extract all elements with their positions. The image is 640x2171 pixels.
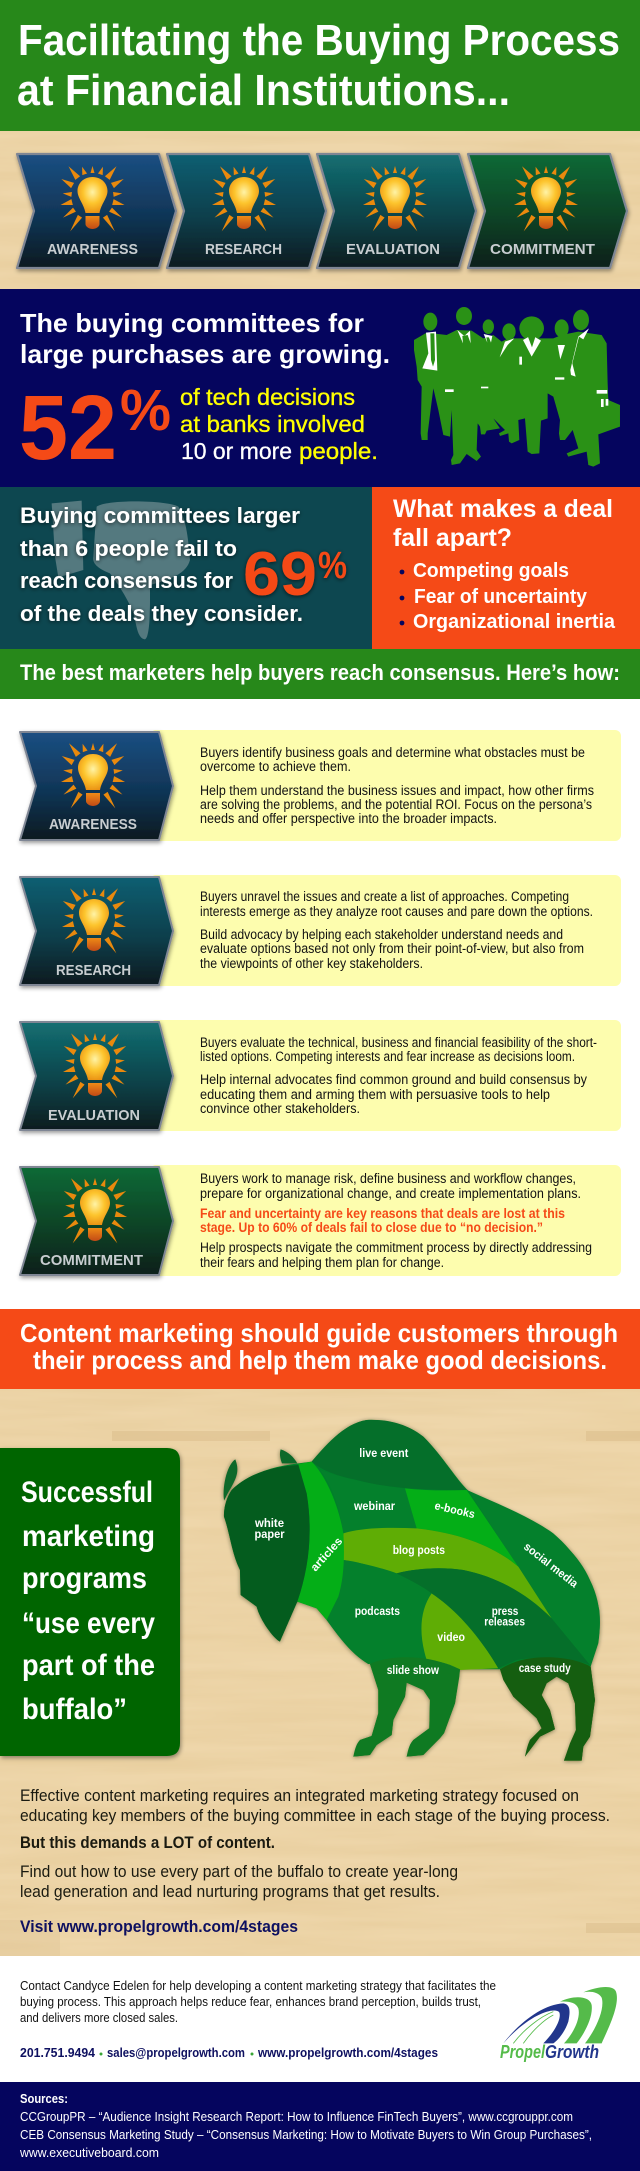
callout: use every part of the buffalo: Successful — [21, 1476, 153, 1509]
card text: Buyers work to manage risk, define business and workflow changes, — [200, 1171, 576, 1186]
text: committees larger than 6: than 6 people fail to — [20, 536, 237, 561]
contact text — [20, 1978, 496, 2025]
labels: buffalo parts — [254, 1448, 580, 1677]
callout: use every part of the buffalo: part of the — [22, 1649, 155, 1682]
labels: buffalo parts: blog posts — [393, 1545, 445, 1557]
card text: Buyers identify business goals and determine what obstacles must be — [200, 745, 585, 760]
card text — [200, 1035, 597, 1116]
chevron: commitment: COMMITMENT — [490, 241, 595, 258]
stat: 52 percent: % — [120, 378, 171, 443]
text: committees larger than 6: of the deals they consider. — [20, 601, 303, 626]
labels: buffalo parts: webinar — [353, 1501, 395, 1513]
callout: use every part of the buffalo: buffalo” — [22, 1693, 127, 1726]
stat: 69 percent: % — [318, 545, 347, 587]
contact panel — [0, 1956, 640, 2082]
chevron badge: EVALUATION — [48, 1107, 140, 1124]
card text: needs and offer perspective into the broader impacts. — [200, 811, 497, 826]
panel: what makes a deal fall apart — [372, 487, 640, 649]
title banner — [0, 0, 640, 131]
sources panel: CEB Consensus Marketing Study – “Consensus Marketing: How to Motivate Buyers to Win Group Purchases”, — [20, 2127, 592, 2142]
heading: fall apart: fall apart? — [393, 524, 512, 552]
labels: buffalo parts: press — [492, 1606, 518, 1618]
stage card: commitment — [20, 1165, 621, 1276]
part: case study — [500, 1657, 595, 1761]
callout: use every part of the buffalo — [0, 1448, 180, 1756]
chevron: evaluation: EVALUATION — [346, 241, 440, 258]
card text — [200, 745, 594, 826]
labels: buffalo parts: live event — [359, 1448, 408, 1460]
text block: content strategy: Effective content marketing requires an integrated marketing strategy focused on — [20, 1787, 579, 1805]
chevron: research: RESEARCH — [205, 241, 282, 258]
stage card: research — [20, 875, 621, 986]
sources panel: CCGroupPR – “Audience Insight Research Report: How to Influence FinTech Buyers”, www.ccgrouppr.com — [20, 2109, 573, 2124]
logo: PropelGrowth: Propel — [500, 2042, 546, 2062]
heading bar: best marketers — [0, 649, 640, 699]
card text: Buyers unravel the issues and create a list of approaches. Competing — [200, 889, 569, 904]
stat description — [180, 384, 378, 464]
part: press releases — [397, 1568, 590, 1668]
contact text: and delivers more closed sales. — [20, 2010, 178, 2025]
icon: thumbs down — [52, 501, 190, 639]
card text: their fears and helping them plan for change. — [200, 1255, 444, 1270]
card text: are solving the problems, and the potential ROI. Focus on the persona’s — [200, 797, 592, 812]
part: video — [421, 1593, 498, 1670]
card text: interests emerge as they analyze root causes and pare down the options. — [200, 904, 593, 919]
labels: buffalo parts: video — [437, 1632, 465, 1644]
part: live event — [312, 1420, 467, 1490]
stat: 52 percent — [19, 377, 171, 479]
card text — [200, 889, 593, 971]
labels: buffalo parts: releases — [484, 1617, 525, 1629]
callout: use every part of the buffalo: programs — [22, 1562, 147, 1595]
icon: committee silhouettes — [414, 307, 620, 467]
stage card: evaluation — [20, 1020, 621, 1131]
sources panel: Sources: — [20, 2091, 68, 2106]
chart: buffalo content map — [224, 1420, 600, 1761]
heading: fall apart: What makes a deal — [393, 495, 613, 523]
title banner: at Financial Institutions... — [17, 66, 510, 115]
labels: buffalo parts: white — [254, 1518, 284, 1530]
contact details: 201.751.9494 — [20, 2045, 96, 2060]
chevron badge — [20, 877, 173, 985]
stat description: 10 or more — [181, 438, 292, 464]
callout: use every part of the buffalo: marketing — [22, 1520, 155, 1553]
heading: committees: large purchases are growing. — [20, 339, 390, 369]
sources panel — [0, 2082, 640, 2171]
wood section — [0, 1389, 640, 1956]
card text: Fear and uncertainty are key reasons that deals are lost at this — [200, 1206, 565, 1221]
text block: content strategy: lead generation and lead nurturing programs that get results. — [20, 1883, 440, 1901]
part: e-books — [405, 1488, 518, 1567]
heading bar: content marketing: their process and help them make good decisions. — [33, 1345, 607, 1375]
callout: use every part of the buffalo: “use every — [22, 1607, 155, 1640]
chevron: commitment — [468, 154, 627, 268]
heading: fall apart — [393, 495, 613, 552]
part: slide show — [353, 1657, 460, 1757]
part: social media — [468, 1491, 600, 1665]
chevron badge — [20, 732, 173, 840]
part: webinar — [320, 1470, 417, 1533]
card text: Build advocacy by helping each stakeholder understand needs and — [200, 927, 563, 942]
chevron badge — [20, 1167, 173, 1275]
chevron badge — [20, 1022, 173, 1130]
stat: 69 percent — [243, 540, 347, 609]
chevron: awareness — [17, 154, 176, 268]
labels: buffalo parts: paper — [254, 1529, 285, 1541]
card text: evaluate options based not only from their point-of-view, but also from — [200, 941, 584, 956]
text: committees larger than 6: Buying committees larger — [20, 503, 300, 528]
card text: overcome to achieve them. — [200, 759, 351, 774]
card text: convince other stakeholders. — [200, 1101, 360, 1116]
panel: committees growing — [0, 289, 640, 487]
heading: committees: The buying committees for — [20, 308, 364, 338]
text block: content strategy: Visit www.propelgrowth.com/4stages — [20, 1918, 298, 1936]
text block: content strategy: But this demands a LOT of content. — [20, 1834, 275, 1852]
chevron: awareness: AWARENESS — [47, 241, 138, 258]
card text: prepare for organizational change, and create implementation plans. — [200, 1186, 581, 1201]
card text: Help them understand the business issues and impact, how other firms — [200, 783, 594, 798]
stat description: at banks involved — [180, 411, 365, 437]
part: articles — [297, 1462, 344, 1620]
list: reasons: Competing goals — [413, 559, 569, 582]
card text — [200, 1171, 592, 1270]
logo: PropelGrowth: Growth — [545, 2042, 599, 2062]
sources panel: www.executiveboard.com — [19, 2145, 159, 2160]
stat description: of tech decisions — [180, 384, 355, 410]
labels: buffalo parts: slide show — [387, 1665, 439, 1677]
stage card: awareness — [20, 730, 621, 841]
stat: 69 percent: 69 — [243, 540, 317, 609]
heading: committees — [20, 308, 390, 369]
panel: consensus failure — [0, 487, 372, 649]
card text: stage. Up to 60% of deals fail to close due to “no decision.” — [200, 1220, 543, 1235]
wood band with process chevrons — [0, 131, 640, 289]
contact details — [20, 2045, 438, 2060]
card text: Help prospects navigate the commitment process by directly addressing — [200, 1240, 592, 1255]
contact details: www.propelgrowth.com/4stages — [257, 2045, 438, 2060]
chevron badge: RESEARCH — [56, 962, 131, 979]
stat: 52 percent: 52 — [19, 377, 117, 479]
chevron badge: COMMITMENT — [40, 1252, 143, 1269]
labels: buffalo parts: e-books — [433, 1500, 476, 1521]
chevron: evaluation — [317, 154, 476, 268]
text: committees larger than 6: reach consensus for — [20, 568, 233, 593]
contact text: Contact Candyce Edelen for help developing a content marketing strategy that facilitates the — [20, 1978, 496, 1993]
card text: Help internal advocates find common ground and build consensus by — [200, 1072, 587, 1087]
part: podcasts — [327, 1560, 432, 1664]
contact text: buying process. This approach helps reduce fear, enhances brand perception, builds trust, — [20, 1994, 481, 2009]
labels: buffalo parts: social media — [521, 1541, 580, 1591]
stat description: people. — [299, 438, 378, 464]
chevron: research — [167, 154, 326, 268]
card text: listed options. Competing interests and fear increase as decisions loom. — [200, 1049, 575, 1064]
text block: content strategy — [20, 1787, 610, 1936]
text block: content strategy: educating key members of the buying committee in each stage of the buying process. — [20, 1807, 610, 1825]
list: reasons — [400, 559, 616, 633]
contact details: sales@propelgrowth.com — [107, 2045, 245, 2060]
card text: educating them and arming them with persuasive tools to help — [200, 1087, 550, 1102]
text: committees larger than 6 — [20, 503, 303, 626]
text block: content strategy: Find out how to use every part of the buffalo to create year-long — [20, 1863, 458, 1881]
card text: Buyers evaluate the technical, business and financial feasibility of the short- — [200, 1035, 597, 1050]
part: white paper — [224, 1465, 310, 1642]
list: reasons: Organizational inertia — [413, 610, 616, 633]
part: blog posts — [343, 1528, 552, 1618]
list: reasons: Fear of uncertainty — [414, 585, 588, 608]
labels: buffalo parts: articles — [309, 1536, 345, 1574]
chevron badge: AWARENESS — [49, 816, 137, 833]
heading bar: content marketing — [0, 1309, 640, 1389]
labels: buffalo parts: case study — [519, 1663, 571, 1675]
labels: buffalo parts: podcasts — [355, 1606, 400, 1618]
logo: PropelGrowth — [500, 1987, 617, 2062]
card text: the viewpoints of other key stakeholders. — [200, 956, 423, 971]
